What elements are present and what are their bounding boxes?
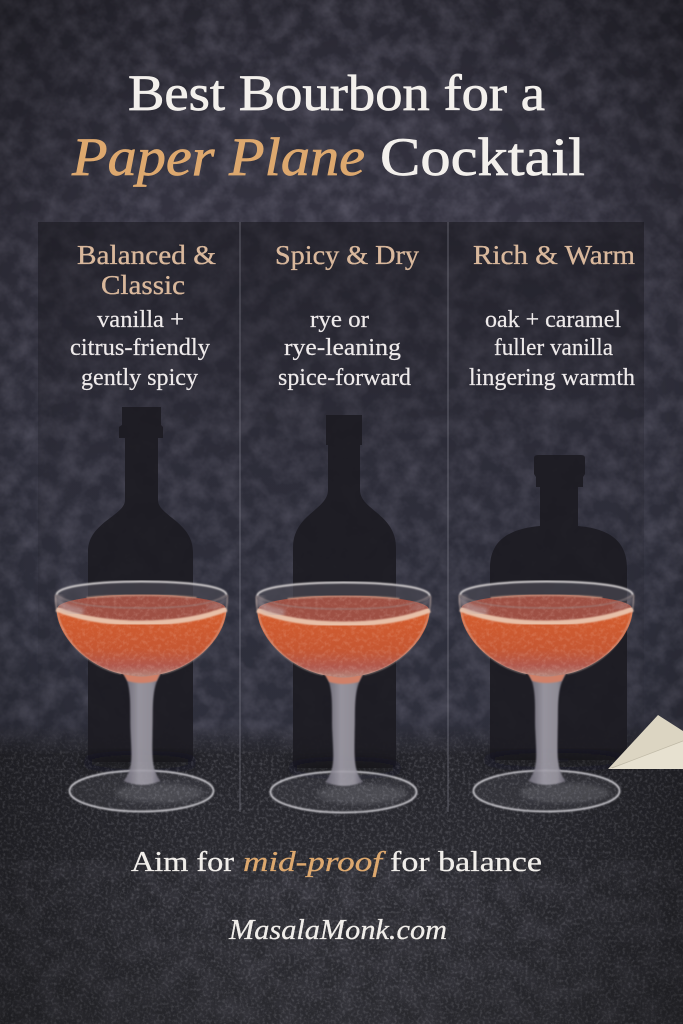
cocktail coupe 2 — [256, 582, 431, 812]
title: Paper Plane — [71, 127, 365, 187]
caption: aim for mid-proof — [131, 847, 542, 878]
website credit: MasalaMonk.com — [228, 915, 447, 946]
title — [71, 66, 585, 187]
icon: paper plane — [608, 715, 683, 769]
column 1 text: Balanced &amp; Classic — [70, 240, 216, 391]
icon: bottle silhouette 1 — [88, 407, 193, 762]
column 2 text: Spicy &amp; Dry — [275, 240, 420, 391]
cocktail coupe 3 — [459, 581, 634, 812]
caption: aim for mid-proof: for balance — [390, 847, 542, 878]
title: Best Bourbon for a — [128, 66, 545, 122]
panel: three column backdrop — [38, 222, 644, 812]
column 2 text: Spicy &amp; Dry: Spicy & Dry — [275, 240, 420, 270]
column 1 text: Balanced &amp; Classic: Balanced & — [77, 240, 216, 270]
icon: bottle silhouette 3 — [490, 455, 627, 760]
column 1 text: Balanced &amp; Classic: gently spicy — [81, 365, 198, 391]
column 1 text: Balanced &amp; Classic: Classic — [101, 270, 185, 300]
column 2 text: Spicy &amp; Dry: spice-forward — [278, 365, 411, 391]
column 1 text: Balanced &amp; Classic: citrus-friendly — [70, 335, 210, 361]
column 3 text: Rich &amp; Warm: lingering warmth — [469, 365, 635, 391]
table shadow under bottles — [80, 753, 630, 775]
column 3 text: Rich &amp; Warm — [469, 240, 635, 391]
column 3 text: Rich &amp; Warm: fuller vanilla — [494, 335, 613, 361]
icon: bottle silhouette 2 — [293, 415, 396, 768]
caption: aim for mid-proof: mid-proof — [243, 847, 386, 878]
column 3 text: Rich &amp; Warm: Rich & Warm — [473, 240, 635, 270]
title: Cocktail — [380, 127, 585, 187]
column 2 text: Spicy &amp; Dry: rye-leaning — [284, 335, 401, 361]
column 1 text: Balanced &amp; Classic: vanilla + — [97, 307, 184, 333]
column 3 text: Rich &amp; Warm: oak + caramel — [485, 307, 621, 333]
column 2 text: Spicy &amp; Dry: rye or — [310, 307, 369, 333]
caption: aim for mid-proof: Aim for — [131, 847, 235, 878]
cocktail coupe 1 — [56, 581, 228, 812]
